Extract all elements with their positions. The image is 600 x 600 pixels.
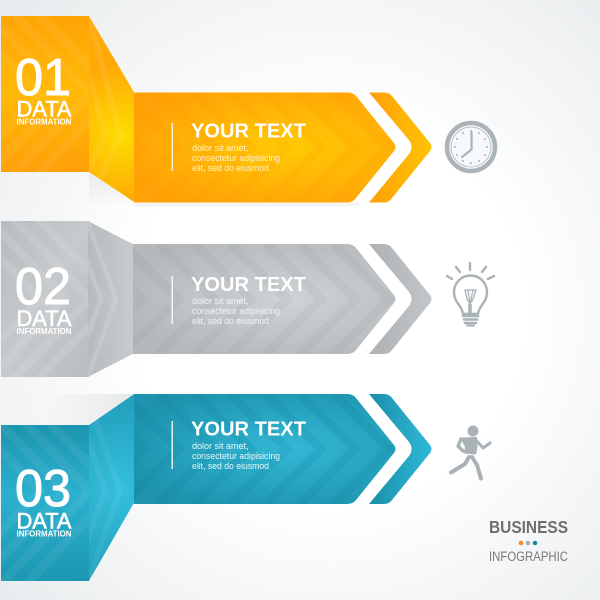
orange number: DATA	[16, 97, 72, 122]
orange text: consectetur adipisicing	[192, 153, 280, 163]
gray arrow bar	[133, 244, 396, 354]
orange number: 01	[15, 49, 71, 107]
title: business infographic: INFOGRAPHIC	[489, 549, 568, 564]
gray number: INFORMATION	[16, 326, 72, 336]
orange chevron	[369, 92, 432, 202]
gray left panel	[1, 221, 89, 377]
orange text	[191, 120, 306, 173]
teal arrow bar	[134, 394, 396, 504]
orange text: elit, sed do eiusmod	[192, 163, 269, 173]
gray number: DATA	[16, 306, 72, 331]
orange divider	[172, 123, 173, 171]
panel: row 01 orange	[1, 16, 432, 202]
gray fold	[88, 222, 133, 376]
orange text: dolor sit amet,	[192, 143, 249, 153]
gray text: consectetur adipisicing	[192, 306, 280, 316]
teal fold	[89, 394, 134, 581]
icon: clock	[447, 123, 495, 171]
teal divider	[172, 421, 173, 469]
gray number: 02	[15, 258, 71, 316]
panel: row 03 teal	[0, 390, 432, 590]
gray text	[191, 273, 306, 326]
teal text: consectetur adipisicing	[192, 451, 280, 461]
gray divider	[172, 276, 173, 324]
legend dots	[519, 541, 537, 545]
teal chevron	[369, 394, 432, 504]
title: business infographic: BUSINESS	[489, 517, 568, 537]
teal number: DATA	[16, 509, 72, 534]
teal left panel	[1, 425, 89, 581]
orange left panel	[1, 16, 89, 172]
panel: row 02 gray	[1, 221, 432, 377]
orange arrow bar	[134, 92, 396, 202]
teal text	[191, 418, 306, 471]
gray text: YOUR TEXT	[191, 273, 306, 296]
gray text: dolor sit amet,	[192, 296, 249, 306]
icon: light bulb	[447, 263, 494, 326]
orange number: INFORMATION	[16, 117, 72, 127]
teal text: YOUR TEXT	[191, 418, 306, 441]
orange text: YOUR TEXT	[191, 120, 306, 143]
title: business infographic	[489, 517, 568, 564]
gray chevron	[369, 244, 432, 354]
icon: running person	[451, 426, 490, 478]
gray text: elit, sed do eiusmod	[192, 316, 269, 326]
teal text: elit, sed do eiusmod	[192, 461, 269, 471]
teal text: dolor sit amet,	[192, 441, 249, 451]
fold shadows	[40, 172, 360, 425]
teal number: 03	[15, 460, 71, 518]
teal number: INFORMATION	[16, 529, 72, 539]
orange fold	[89, 16, 134, 202]
